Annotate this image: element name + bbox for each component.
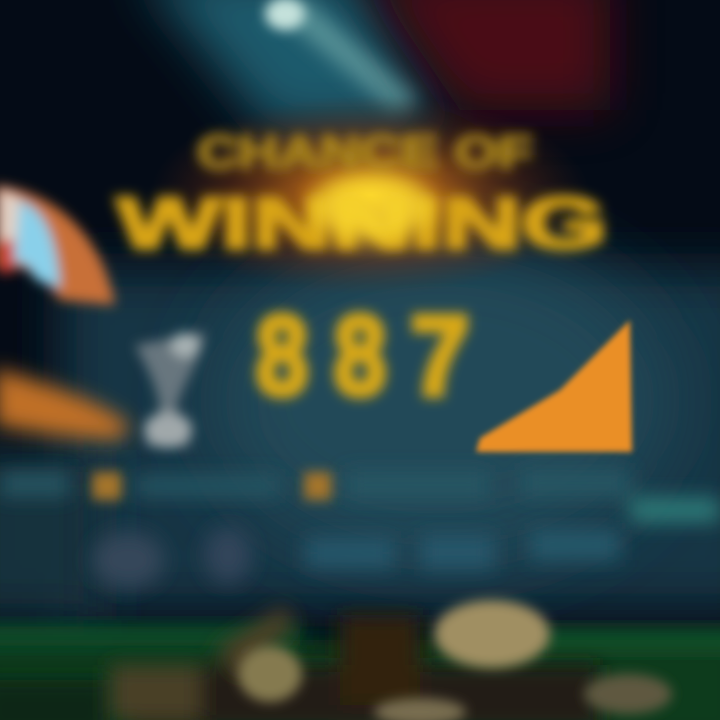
digit 3: 7 — [411, 293, 469, 418]
striped left object — [0, 185, 115, 305]
trophy icon — [135, 332, 205, 448]
tan mushrooms — [238, 600, 672, 720]
orange triangle — [476, 320, 632, 452]
title line 2: WINNING — [117, 184, 607, 264]
bright title centre — [312, 174, 432, 242]
title — [117, 126, 607, 264]
brown objects — [110, 605, 600, 720]
digit 2: 8 — [334, 293, 386, 418]
digit 1: 8 — [256, 293, 308, 418]
yellow digits — [256, 293, 469, 418]
central title glow — [150, 95, 590, 295]
green field — [0, 626, 720, 720]
title line 1: CHANCE OF — [198, 126, 532, 178]
teal spotlight beam — [140, 0, 440, 130]
faint text row 2 — [92, 527, 620, 588]
dark red glow top right — [365, 0, 610, 110]
small orange squares — [92, 472, 332, 500]
faint text row 1 — [0, 470, 720, 522]
orange bar left — [0, 368, 130, 440]
